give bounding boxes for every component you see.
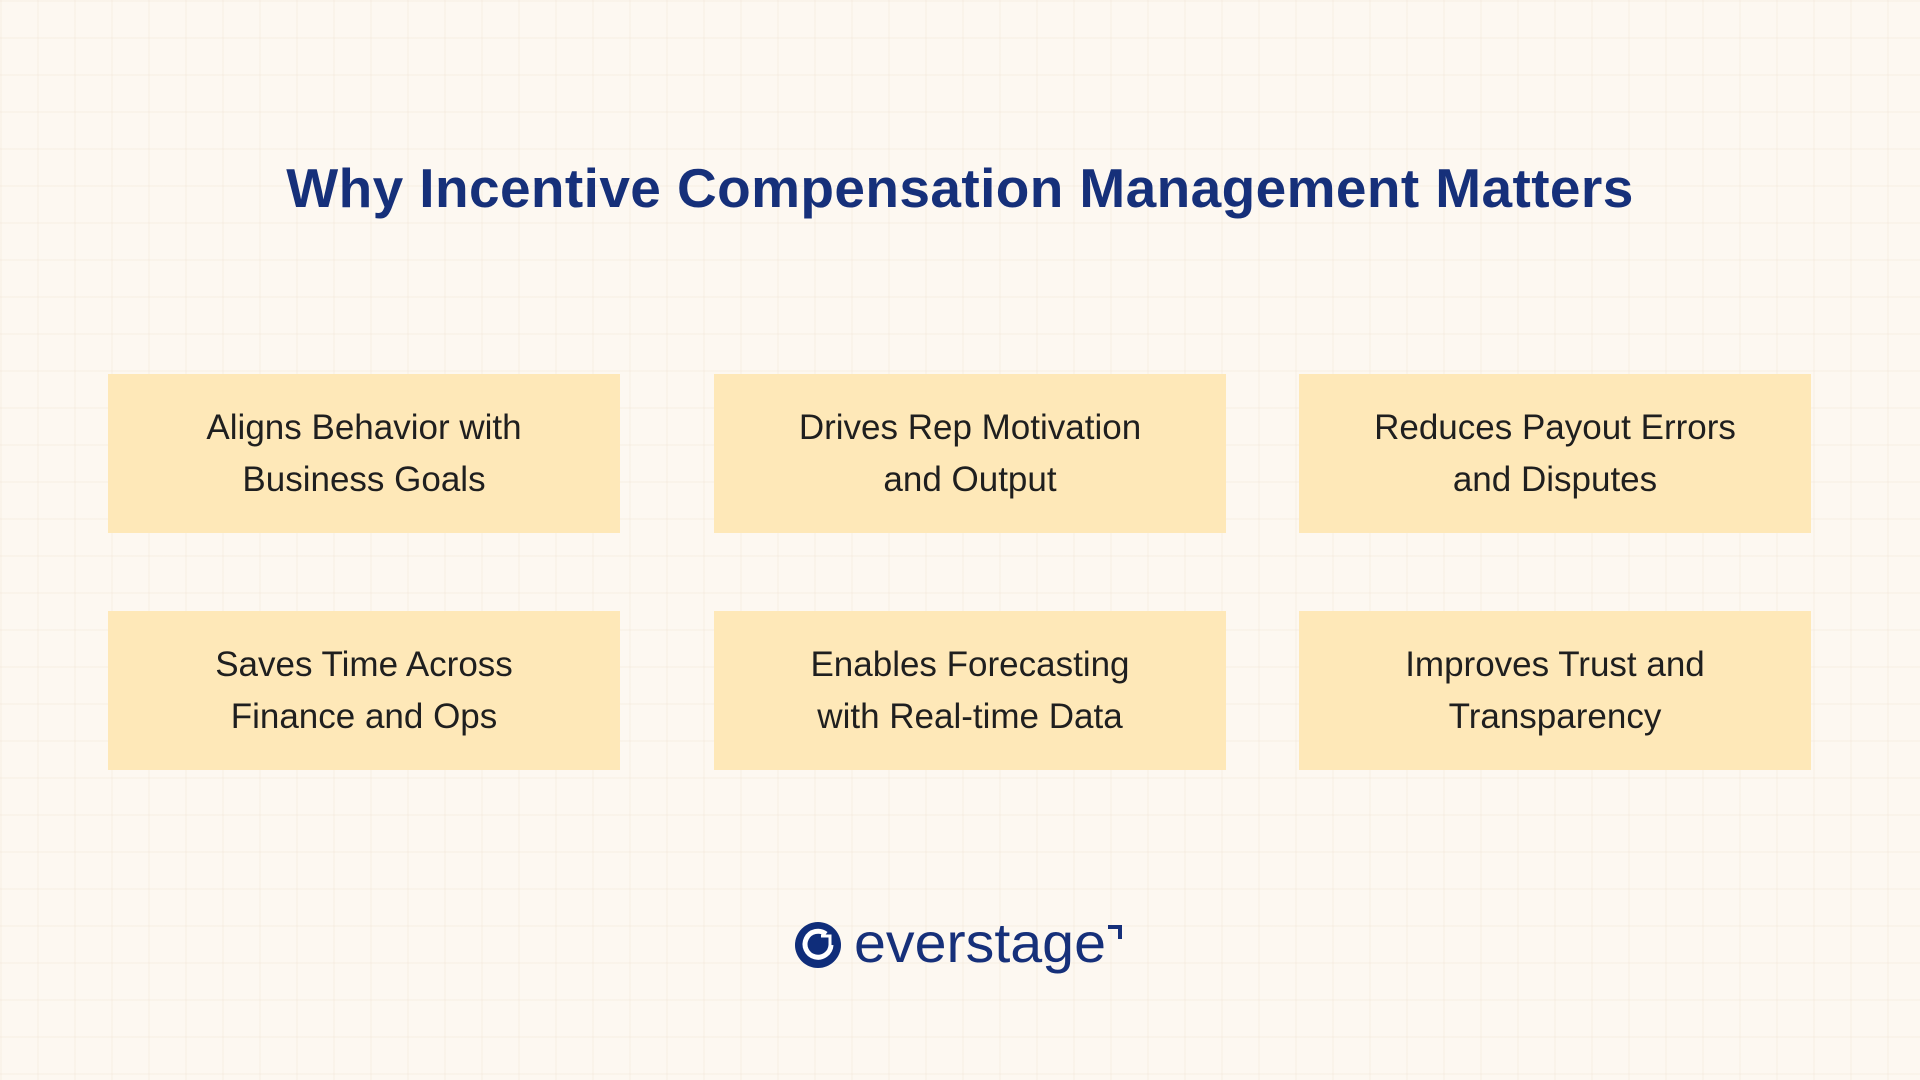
card: reduces errors: Reduces Payout Errors — [1374, 408, 1736, 446]
card: saves time: Saves Time Across — [215, 644, 513, 684]
card: aligns behavior: Aligns Behavior with — [206, 408, 522, 446]
card: forecasting: with Real-time Data — [817, 696, 1123, 736]
card: drives motivation: Drives Rep Motivation — [799, 408, 1141, 446]
card: forecasting: Enables Forecasting — [810, 644, 1130, 684]
card: trust: Transparency — [1449, 696, 1661, 736]
card: drives motivation — [714, 374, 1226, 533]
card: trust: Improves Trust and — [1405, 644, 1705, 684]
title: Why Incentive Compensation Management Matters — [286, 157, 1634, 219]
logo: everstage — [795, 912, 1122, 974]
card: aligns behavior: Business Goals — [242, 460, 486, 498]
icon: logo mark — [795, 922, 841, 968]
card: saves time: Finance and Ops — [231, 696, 497, 736]
card: forecasting — [714, 611, 1226, 770]
card: reduces errors — [1299, 374, 1811, 533]
card: reduces errors: and Disputes — [1453, 460, 1657, 498]
card: trust — [1299, 611, 1811, 770]
logo text: everstage — [854, 912, 1106, 974]
card: aligns behavior — [108, 374, 620, 533]
card: saves time — [108, 611, 620, 770]
card: drives motivation: and Output — [883, 460, 1057, 498]
